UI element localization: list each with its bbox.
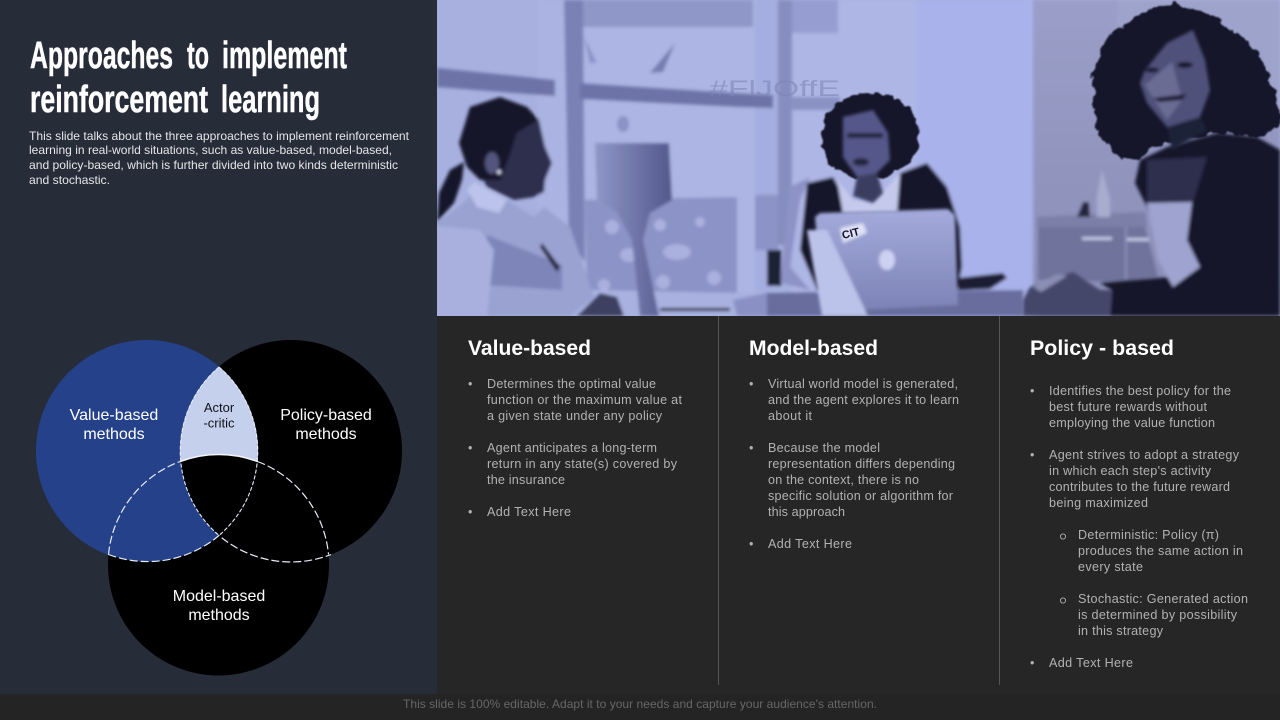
- circle: policy-based methods: [180, 340, 402, 562]
- bullet list: model-based: and the agent explores it to learn: [768, 393, 959, 407]
- divider: [718, 316, 720, 685]
- bullet list: policy-based: employing the value function: [1049, 416, 1215, 430]
- bullet list: policy-based: •: [1030, 448, 1034, 462]
- bullet list: value-based: return in any state(s) covered by: [487, 457, 678, 471]
- bullet list: policy-based: produces the same action in: [1078, 544, 1243, 558]
- left woman hair and face: [480, 120, 552, 200]
- photo: three women in a meeting: [437, 0, 1280, 316]
- bullet list: value-based: Determines the optimal value: [487, 377, 656, 391]
- right woman hands: [1023, 272, 1112, 316]
- label: value-based methods: Value-based: [70, 407, 158, 424]
- bullet list: value-based: •: [468, 441, 472, 455]
- bullet list: policy-based: every state: [1078, 560, 1143, 574]
- venn diagram: [36, 340, 402, 676]
- overlap: value and policy and model: [180, 455, 258, 535]
- footer bar: [0, 694, 1280, 720]
- footer text: This slide is 100% editable. Adapt it to your needs and capture your audience's attention.: [403, 697, 877, 711]
- bullet list: value-based: •: [468, 377, 472, 391]
- text block: description: [29, 129, 410, 187]
- bullet list: model-based: on the context, there is no: [768, 473, 919, 487]
- bullet list: model-based: Because the model: [768, 441, 880, 455]
- bullet list: value-based: a given state under any policy: [487, 409, 663, 423]
- bullet list: model-based: •: [749, 377, 753, 391]
- bullet list: model-based: •: [749, 441, 753, 455]
- circle: value-based methods: [36, 340, 258, 562]
- heading: policy-based: Policy - based: [1030, 337, 1174, 360]
- bullet list: policy-based: Identifies the best policy for the: [1049, 384, 1231, 398]
- bullet list: model-based: [749, 377, 959, 551]
- bullet list: policy-based: •: [1030, 384, 1034, 398]
- column: model-based: [749, 337, 959, 551]
- middle woman chair: [780, 177, 810, 290]
- label: policy-based methods: Policy-based: [280, 407, 372, 424]
- text block: description: and stochastic.: [29, 173, 110, 187]
- label: actor-critic: -critic: [203, 416, 235, 430]
- title: to: [187, 35, 209, 77]
- laptop sticker: CIT: [841, 226, 861, 242]
- panel: right dark background: [437, 316, 1280, 694]
- column: value-based: [468, 337, 682, 519]
- bullet list: policy-based: being maximized: [1049, 496, 1148, 510]
- column: policy-based: [1030, 337, 1248, 670]
- right woman hair: [1092, 3, 1280, 160]
- label: actor-critic: Actor: [204, 400, 234, 415]
- overlap: actor-critic: [180, 366, 258, 535]
- reflections on the glass: [650, 43, 675, 73]
- label: model-based methods: Model-based: [173, 588, 265, 605]
- bullet list: policy-based: Agent strives to adopt a strategy: [1049, 448, 1240, 462]
- middle woman hair: [821, 92, 919, 180]
- bullet list: model-based: Virtual world model is generated,: [768, 377, 958, 391]
- bullet list: value-based: •: [468, 505, 472, 519]
- solid arc above the triple overlap: [180, 454, 258, 462]
- label: policy-based methods: methods: [295, 426, 357, 443]
- bullet list: model-based: specific solution or algorithm for: [768, 489, 953, 503]
- heading: value-based: Value-based: [468, 337, 591, 360]
- title: [30, 35, 347, 121]
- bullet list: policy-based: contributes to the future reward: [1049, 480, 1230, 494]
- bullet list: policy-based: •: [1030, 656, 1034, 670]
- dotted lens outlines: [180, 367, 258, 536]
- title: Approaches: [30, 35, 173, 77]
- label: value-based methods: methods: [83, 426, 145, 443]
- text block: description: This slide talks about the three approaches to implement reinforcement: [29, 129, 410, 143]
- window frames: [564, 0, 585, 262]
- table: [767, 290, 1023, 316]
- bullet list: model-based: about it: [768, 409, 812, 423]
- bullet list: policy-based: in this strategy: [1078, 624, 1164, 638]
- text block: description: learning in real-world situations, such as value-based, model-based,: [29, 143, 392, 157]
- window lettering: #FlJOffE: [709, 76, 840, 101]
- title: learning: [221, 79, 320, 121]
- panel: left navy background: [0, 0, 437, 694]
- title: implement: [222, 35, 347, 77]
- text block: description: and policy-based, which is further divided into two kinds deterministic: [29, 158, 398, 172]
- label: model-based methods: methods: [188, 607, 250, 624]
- heading: model-based: Model-based: [749, 337, 878, 360]
- bullet list: value-based: function or the maximum value at: [487, 393, 682, 407]
- right woman sweater: [1100, 133, 1280, 316]
- dashed outlines: [108, 462, 331, 562]
- cabinet: [1037, 212, 1147, 227]
- lamp: [595, 143, 672, 316]
- bullet list: model-based: •: [749, 537, 753, 551]
- circle: model-based methods: [108, 536, 329, 676]
- bullet list: model-based: Add Text Here: [768, 537, 852, 551]
- bullet list: policy-based: is determined by possibility: [1078, 608, 1238, 622]
- divider: [998, 316, 1000, 685]
- bullet list: policy-based: best future rewards without: [1049, 400, 1208, 414]
- title: reinforcement: [30, 79, 208, 121]
- laptop: [815, 209, 958, 312]
- bullet list: policy-based: Add Text Here: [1049, 656, 1133, 670]
- bullet list: value-based: Add Text Here: [487, 505, 571, 519]
- middle woman cardigan: [800, 163, 962, 290]
- paper in front of laptop: [807, 230, 868, 316]
- bullet list: value-based: the insurance: [487, 473, 565, 487]
- bullet list: value-based: [468, 377, 682, 519]
- bullet list: policy-based: Stochastic: Generated action: [1078, 592, 1248, 606]
- bullet list: policy-based: in which each step's activity: [1049, 464, 1212, 478]
- lower window: [585, 197, 737, 293]
- bullet list: policy-based: Deterministic: Policy (π): [1078, 528, 1219, 542]
- bullet list: value-based: Agent anticipates a long-term: [487, 441, 657, 455]
- bullet list: model-based: representation differs depending: [768, 457, 955, 471]
- bullet list: policy-based: [1030, 384, 1248, 670]
- middle woman face: [843, 110, 890, 177]
- right woman face: [1140, 30, 1210, 130]
- left woman shirt: [437, 182, 594, 316]
- bullet list: model-based: this approach: [768, 505, 845, 519]
